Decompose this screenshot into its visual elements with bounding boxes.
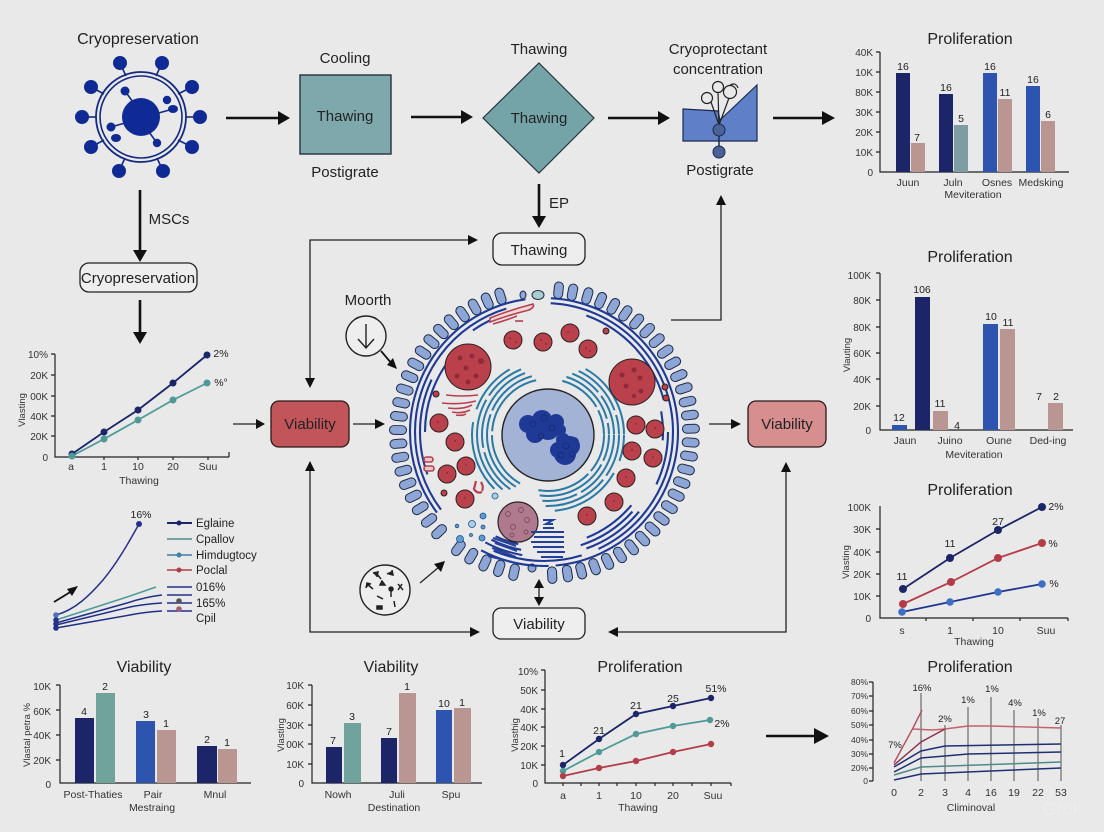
- chart: bottom viability bars 1: Mnul: [204, 789, 226, 801]
- chart: bottom viability bars 2: 10: [438, 698, 450, 710]
- chart: bottom viability bars 2: Nowh: [325, 789, 352, 801]
- connector: viability up to thawing box: [305, 235, 478, 388]
- chart: top-right proliferation bars: 80K: [855, 88, 873, 99]
- box: thawing square: [300, 75, 391, 154]
- chart: left thawing lines: Thawing: [119, 475, 159, 487]
- heading: viability: Viability: [364, 659, 418, 676]
- chart: bottom proliferation lines: 40K: [520, 705, 538, 716]
- chart: right proliferation lines: [841, 482, 1068, 648]
- chart: right proliferation lines: 40K: [853, 548, 871, 559]
- chart: bottom proliferation lines: 21: [593, 725, 605, 737]
- chart: bottom viability bars 2: 10K: [286, 681, 304, 692]
- chart: bottom proliferation lines: Thawing: [618, 802, 658, 814]
- chart: bottom-right proliferation multi-line: 3: [942, 787, 948, 799]
- chart: bottom viability bars 1: 60K: [33, 707, 51, 718]
- arrow: cooling to thawing: [411, 110, 473, 124]
- chart: bottom viability bars 2: 60K: [286, 701, 304, 712]
- panel: cryoprotectant concentration: [669, 41, 768, 179]
- chart: left thawing lines: 1: [101, 461, 107, 473]
- chart: top-right proliferation bars: 16: [1027, 74, 1039, 86]
- chart: curves with legend: [53, 509, 257, 631]
- chart: curves with legend: 16%: [130, 509, 152, 521]
- chart: bottom-right proliferation multi-line: 20%: [851, 763, 868, 773]
- chart: bottom proliferation lines: a: [560, 790, 566, 802]
- chart: bottom viability bars 1: 10K: [33, 682, 51, 693]
- chart: right proliferation bars: 106: [913, 284, 931, 296]
- label: postigrate: Postigrate: [311, 164, 379, 181]
- chart: bottom viability bars 1: 0: [45, 780, 51, 791]
- label: cooling: Cooling: [320, 50, 370, 67]
- label: EP: EP: [549, 195, 569, 212]
- arrow: bottom chart to right chart: [766, 728, 829, 744]
- box: thawing: [493, 233, 585, 265]
- legend: Cpallov: [196, 534, 235, 546]
- chart: bottom-right proliferation multi-line: 1%: [961, 695, 975, 706]
- chart: bottom viability bars 1: [22, 659, 251, 814]
- chart: bottom viability bars 2: Vlasting: [276, 718, 287, 752]
- chart: right proliferation lines: 10: [992, 625, 1004, 637]
- chart: bottom-right proliferation multi-line: 0: [863, 776, 868, 786]
- chart: bottom viability bars 1: 3: [143, 709, 149, 721]
- chart: right proliferation bars: Ded-ing: [1030, 435, 1067, 447]
- arrow: MSCs down: [133, 190, 147, 262]
- chart: right proliferation lines: 0: [865, 614, 871, 625]
- chart: bottom proliferation lines: 1: [596, 790, 602, 802]
- legend: Cpil: [196, 613, 216, 625]
- chart: left thawing lines: Suu: [199, 461, 217, 473]
- arrow: diamond to thawing box: [532, 184, 546, 228]
- label: postigrate under vessel: Postigrate: [686, 162, 754, 179]
- chart: right proliferation bars: 4: [954, 420, 960, 432]
- chart: bottom-right proliferation multi-line: 16: [985, 787, 997, 799]
- chart: top-right proliferation bars: Medsking: [1019, 177, 1064, 189]
- chart: bottom viability bars 2: 7: [386, 726, 392, 738]
- vacuole: [498, 502, 538, 542]
- chart: bottom proliferation lines: 51%: [705, 683, 727, 695]
- chart: top-right proliferation bars: 16: [897, 61, 909, 73]
- label: thawing above diamond: Thawing: [511, 41, 567, 58]
- label: thawing in square: Thawing: [317, 108, 373, 125]
- chart: bottom viability bars 2: 10K: [286, 760, 304, 771]
- chart: bottom viability bars 1: 1: [163, 718, 169, 730]
- chart: top-right proliferation bars: 40K: [855, 48, 873, 59]
- box: cryopreservation: [80, 263, 197, 292]
- chart: right proliferation lines: Suu: [1037, 625, 1055, 637]
- chart: bottom proliferation lines: Vlasthig: [510, 718, 521, 752]
- label: cryoprotectant concentration: concentration: [673, 61, 763, 78]
- box: viability bottom: Viability: [513, 616, 565, 633]
- chart: top-right proliferation bars: 5: [958, 113, 964, 125]
- perinuclear rings: [472, 359, 624, 511]
- chart: bottom-right proliferation multi-line: Climinoval: [947, 802, 995, 814]
- heading: cryopreservation: Cryopreservation: [77, 31, 199, 48]
- golgi: top: [490, 304, 534, 324]
- heading: proliferation: Proliferation: [927, 482, 1013, 499]
- panel: thawing diamond step: [483, 41, 594, 173]
- legend: Himdugtocy: [196, 550, 257, 562]
- chart: left thawing lines: a: [68, 461, 74, 473]
- box: cryopreservation: Cryopreservation: [81, 270, 195, 287]
- chart: top-right proliferation bars: 6: [1045, 109, 1051, 121]
- chart: bottom viability bars 2: 7: [330, 735, 336, 747]
- chart: top-right proliferation bars: 16: [940, 82, 952, 94]
- chart: top-right proliferation bars: 20K: [855, 128, 873, 139]
- chart: top-right proliferation bars: 10K: [855, 148, 873, 159]
- chart: right proliferation lines: Vlasting: [841, 545, 852, 579]
- chart: bottom viability bars 2: Spu: [442, 789, 460, 801]
- chart: bottom proliferation lines: [510, 659, 731, 814]
- box: viability left: [271, 401, 349, 447]
- chart: bottom-right proliferation multi-line: 2%: [938, 714, 952, 725]
- arrow: cell to bottom viability double: [534, 579, 544, 606]
- chart: bottom proliferation lines: 1: [559, 748, 565, 760]
- label: cryoprotectant concentration: Cryoprotectant: [669, 41, 767, 58]
- chart: right proliferation bars: 80K: [853, 296, 871, 307]
- chart: left thawing lines: 40K: [30, 412, 48, 423]
- chart: left thawing lines: 0: [42, 453, 48, 464]
- chart: bottom-right proliferation multi-line: 70%: [851, 691, 868, 701]
- icon: magnifier with down arrow: [346, 316, 397, 369]
- chart: bottom proliferation lines: 2%: [714, 718, 730, 730]
- chart: right proliferation lines: 10K: [853, 592, 871, 603]
- arrow: cell to cooling: [226, 111, 290, 125]
- chart: bottom-right proliferation multi-line: 4%: [1008, 698, 1022, 709]
- box: viability right: [748, 401, 826, 447]
- chart: bottom viability bars 2: Juli: [389, 789, 405, 801]
- chart: left thawing lines: 20K: [30, 371, 48, 382]
- arrow: particles to cell: [420, 561, 445, 583]
- chart: top-right proliferation bars: 10K: [855, 68, 873, 79]
- chart: bottom proliferation lines: 20: [667, 790, 679, 802]
- chart: right proliferation bars: 11: [1003, 317, 1014, 329]
- illustration: central cell: [389, 282, 700, 584]
- watermark: Grok: [1042, 799, 1082, 819]
- chart: right proliferation bars: 0: [865, 426, 871, 437]
- chart: bottom viability bars 2: 3: [349, 711, 355, 723]
- chart: bottom viability bars 2: 30K: [286, 721, 304, 732]
- mitochondria: [430, 324, 669, 525]
- box: viability right: Viability: [761, 416, 813, 433]
- icon: vessel with bubbles: [683, 82, 757, 158]
- chart: bottom proliferation lines: Suu: [704, 790, 722, 802]
- chart: right proliferation lines: 27: [992, 516, 1004, 528]
- legend: Poclal: [196, 565, 227, 577]
- chart: right proliferation bars: 11: [935, 398, 946, 410]
- chart: right proliferation bars: 40K: [853, 375, 871, 386]
- chart: bottom viability bars 2: 0: [298, 779, 304, 790]
- chart: bottom proliferation lines: 10K: [520, 761, 538, 772]
- chart: bottom viability bars 2: 00K: [286, 740, 304, 751]
- icon: particle circle: [360, 565, 410, 615]
- chart: right proliferation bars: [842, 249, 1073, 461]
- chart: bottom viability bars 2: Destination: [368, 802, 420, 814]
- heading: proliferation: Proliferation: [927, 249, 1013, 266]
- chart: bottom-right proliferation multi-line: [851, 659, 1067, 814]
- chart: right proliferation lines: 30K: [853, 525, 871, 536]
- chart: bottom-right proliferation multi-line: 19: [1008, 787, 1020, 799]
- arrow: viability to cell: [353, 419, 385, 429]
- icon: MSC cell with receptors: [75, 56, 207, 178]
- chart: bottom viability bars 1: Mestraing: [129, 802, 175, 814]
- chart: left thawing lines: 20: [167, 461, 179, 473]
- box: thawing: Thawing: [511, 242, 567, 259]
- chart: bottom proliferation lines: 50K: [520, 686, 538, 697]
- label: moorth: Moorth: [345, 292, 391, 309]
- chart: bottom-right proliferation multi-line: 53: [1055, 787, 1067, 799]
- chart: bottom-right proliferation multi-line: 4: [965, 787, 971, 799]
- heading: proliferation: Proliferation: [597, 659, 683, 676]
- chart: bottom proliferation lines: 25: [667, 693, 679, 705]
- arrow: diamond to cryoprotectant: [608, 111, 670, 125]
- panel: cooling step: [300, 50, 391, 181]
- chart: right proliferation lines: 1: [947, 625, 953, 637]
- chart: bottom-right proliferation multi-line: 1%: [985, 684, 999, 695]
- diamond: thawing: [483, 63, 594, 173]
- label: MSCs: MSCs: [149, 211, 189, 228]
- heading: proliferation: Proliferation: [927, 31, 1013, 48]
- panel: cryopreservation virus-like cell: [75, 31, 207, 178]
- connector: bottom viability to left viability: [305, 461, 480, 637]
- chart: right proliferation lines: s: [899, 625, 905, 637]
- outer pill ring: [389, 282, 700, 584]
- endoplasmic stack: [488, 520, 565, 562]
- chart: bottom-right proliferation multi-line: 60%: [851, 706, 868, 716]
- chart: right proliferation bars: 7: [1036, 391, 1042, 403]
- chart: bottom proliferation lines: 21: [630, 700, 642, 712]
- chart: right proliferation lines: %: [1049, 578, 1059, 590]
- chart: bottom viability bars 2: [276, 659, 482, 814]
- chart: bottom-right proliferation multi-line: 7%: [888, 740, 902, 751]
- box: viability left: Viability: [284, 416, 336, 433]
- chart: right proliferation bars: 10: [985, 311, 997, 323]
- chart: right proliferation bars: 2: [1053, 391, 1059, 403]
- chart: right proliferation lines: Thawing: [954, 636, 994, 648]
- membranes: [406, 294, 682, 570]
- arrow: cell to right viability: [709, 419, 741, 429]
- legend: Eglaine: [196, 518, 234, 530]
- vesicles: [455, 493, 498, 542]
- golgi: left: [424, 395, 483, 493]
- arrow: cryopreservation down: [133, 300, 147, 344]
- chart: bottom viability bars 2: 1: [404, 681, 410, 693]
- nucleus: [502, 389, 594, 481]
- chart: bottom viability bars 1: 2: [102, 681, 108, 693]
- label: thawing in diamond: Thawing: [511, 110, 567, 127]
- chart: bottom viability bars 1: 2: [204, 734, 210, 746]
- chart: bottom-right proliferation multi-line: 50%: [851, 720, 868, 730]
- chart: bottom-right proliferation multi-line: 2: [918, 787, 924, 799]
- chart: right proliferation bars: Jaun: [894, 435, 917, 447]
- chart: bottom-right proliferation multi-line: 40%: [851, 735, 868, 745]
- chart: right proliferation lines: 2%: [1048, 501, 1064, 513]
- chart: bottom viability bars 1: Post-Thaties: [64, 789, 122, 801]
- chart: right proliferation bars: 60K: [853, 349, 871, 360]
- chart: top-right proliferation bars: Juun: [897, 177, 920, 189]
- legend: 165%: [196, 598, 225, 610]
- arrow: rising trend: [54, 586, 78, 602]
- chart: bottom proliferation lines: 20K: [520, 742, 538, 753]
- chart: left thawing lines: 2%: [213, 348, 229, 360]
- box: viability bottom: [493, 608, 585, 639]
- chart: bottom viability bars 1: 1: [224, 737, 230, 749]
- chart: right proliferation lines: %: [1048, 538, 1058, 550]
- chart: right proliferation bars: Meviteration: [945, 449, 1003, 461]
- chart: bottom proliferation lines: 40K: [520, 723, 538, 734]
- chart: bottom viability bars 1: Vlastal petra %: [22, 703, 33, 767]
- chart: bottom proliferation lines: 0: [532, 779, 538, 790]
- chart: right proliferation bars: Oune: [986, 435, 1012, 447]
- heading: viability: Viability: [117, 659, 171, 676]
- chart: left thawing lines: [17, 348, 229, 487]
- chart: top-right proliferation bars: 30K: [855, 108, 873, 119]
- chart: top-right proliferation bars: 0: [867, 168, 873, 179]
- chart: bottom viability bars 1: 20K: [33, 756, 51, 767]
- chart: bottom-right proliferation multi-line: 30%: [851, 749, 868, 759]
- chart: right proliferation lines: 11: [945, 538, 956, 550]
- chart: top-right proliferation bars: Osnes: [982, 177, 1012, 189]
- chart: left thawing lines: 10: [132, 461, 144, 473]
- chart: top-right proliferation bars: Juln: [943, 177, 963, 189]
- chart: bottom-right proliferation multi-line: 80%: [851, 677, 868, 687]
- connector: bottom viability to right viability: [608, 462, 791, 637]
- chart: bottom viability bars 2: 1: [459, 697, 465, 709]
- chart: bottom viability bars 1: Pair: [144, 789, 163, 801]
- legend: [167, 518, 257, 625]
- chart: left thawing lines: %°: [214, 377, 228, 389]
- chart: bottom-right proliferation multi-line: 0: [891, 787, 897, 799]
- chart: bottom viability bars 1: 4: [81, 706, 87, 718]
- chart: right proliferation bars: Vlauting: [842, 338, 853, 372]
- chart: top-right proliferation bars: [855, 31, 1069, 201]
- chart: top-right proliferation bars: Meviteration: [944, 189, 1002, 201]
- chart: top-right proliferation bars: 7: [914, 132, 920, 144]
- chart: left thawing lines: 00K: [30, 392, 48, 403]
- chart: right proliferation lines: 20K: [853, 570, 871, 581]
- chart: right proliferation bars: Juino: [937, 435, 963, 447]
- chart: left thawing lines: 10%: [28, 350, 48, 361]
- chart: bottom-right proliferation multi-line: 27: [1055, 716, 1065, 727]
- chart: right proliferation bars: 20K: [853, 402, 871, 413]
- arrow: cryoprotectant to chart: [773, 111, 835, 125]
- arrow: line chart to viability: [233, 419, 265, 429]
- chart: top-right proliferation bars: 11: [1000, 87, 1011, 99]
- legend: 016%: [196, 582, 225, 594]
- chart: bottom-right proliferation multi-line: 22: [1032, 787, 1044, 799]
- chart: bottom-right proliferation multi-line: 1%: [1032, 708, 1046, 719]
- chart: bottom-right proliferation multi-line: 16%: [912, 683, 932, 694]
- chart: right proliferation bars: 80K: [853, 323, 871, 334]
- chart: right proliferation lines: 100K: [848, 503, 871, 514]
- chart: bottom proliferation lines: 10: [630, 790, 642, 802]
- chart: right proliferation bars: 12: [893, 412, 905, 424]
- chart: left thawing lines: Vlasting: [17, 393, 28, 427]
- chart: top-right proliferation bars: 16: [984, 61, 996, 73]
- heading: proliferation: Proliferation: [927, 659, 1013, 676]
- chart: left thawing lines: 20K: [30, 432, 48, 443]
- chart: right proliferation bars: 100K: [848, 271, 871, 282]
- chart: right proliferation lines: 11: [897, 571, 908, 583]
- chart: bottom proliferation lines: 10%: [518, 667, 538, 678]
- connector: cell to postigrate: [671, 195, 726, 320]
- chart: bottom viability bars 1: 40K: [33, 731, 51, 742]
